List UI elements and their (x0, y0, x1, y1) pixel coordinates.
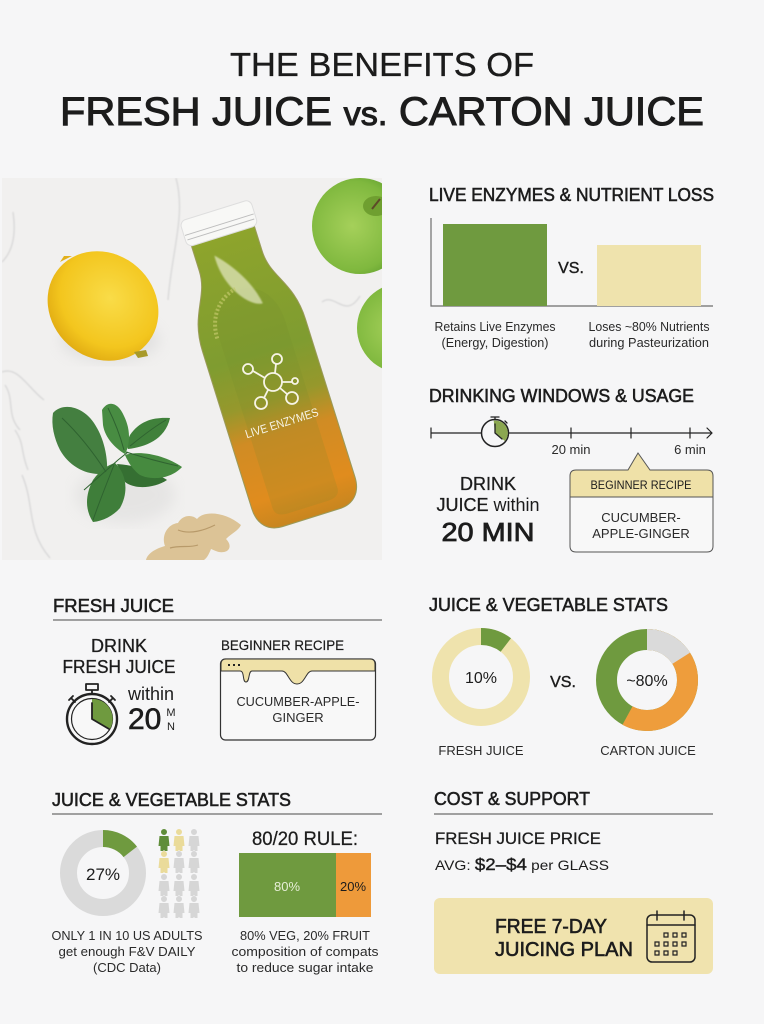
80/20 caption: 80% VEG, 20% FRUIT (240, 928, 370, 943)
recipe card: GINGER (272, 710, 324, 725)
price: AVG: $2–$4 per GLASS (435, 855, 609, 874)
bottle label: LIVE ENZYMES (243, 405, 320, 441)
call to action: free plan: FREE 7-DAY (495, 916, 607, 938)
bar labels: (Energy, Digestion) (442, 335, 548, 350)
icon: ginger (146, 513, 241, 560)
drink within callout: DRINK (460, 474, 516, 494)
bar labels (434, 319, 710, 350)
bar chart: VS. (558, 260, 584, 277)
icon: stopwatch (67, 684, 117, 744)
adults caption: (CDC Data) (93, 960, 161, 975)
80/20 caption: to reduce sugar intake (236, 960, 374, 975)
call to action: free plan (434, 898, 713, 974)
bar chart (431, 218, 713, 306)
photo: juice bottle on marble (2, 178, 382, 560)
title (60, 46, 704, 134)
heading: LIVE ENZYMES & NUTRIENT LOSS (429, 185, 714, 205)
heading: DRINKING WINDOWS & USAGE (429, 386, 694, 406)
icon: mint leaves (52, 404, 182, 522)
80/20 rule heading: 80/20 RULE: (252, 829, 358, 850)
adults caption (52, 928, 203, 975)
title: THE BENEFITS OF (230, 46, 534, 83)
vs label: VS. (550, 674, 576, 691)
drink instruction: DRINK (91, 636, 147, 656)
bar labels: during Pasteurization (589, 335, 709, 350)
icon: green apples (312, 178, 382, 368)
donut: 27% (68, 838, 138, 908)
panel: cost and support (434, 789, 713, 974)
icon: lemon (48, 251, 158, 361)
within 20 min (127, 684, 176, 736)
bar labels: Retains Live Enzymes (434, 319, 556, 334)
drink within callout (436, 474, 540, 547)
drink instruction: FRESH JUICE (62, 657, 176, 677)
stacked bar (239, 853, 371, 917)
donut: fresh juice (440, 636, 522, 718)
recipe label: BEGINNER RECIPE (221, 637, 344, 653)
icon: juice bottle (180, 200, 358, 528)
recipe card (570, 453, 713, 552)
bar labels: Loses ~80% Nutrients (588, 319, 710, 334)
price: FRESH JUICE PRICE (435, 829, 601, 848)
price (435, 829, 609, 874)
icon: enzyme molecule on bottle (243, 354, 298, 409)
adults caption: get enough F&V DAILY (58, 944, 196, 959)
within 20 min: 20 (128, 703, 161, 736)
donut: carton juice (606, 640, 688, 720)
heading: JUICE & VEGETABLE STATS (429, 595, 668, 615)
icon: stopwatch (482, 417, 509, 446)
within 20 min: M (166, 707, 176, 719)
stacked bar: 80% (274, 879, 300, 894)
drink within callout: JUICE within (436, 495, 540, 515)
recipe card: BEGINNER RECIPE (590, 478, 692, 492)
icon grid: people (158, 829, 200, 918)
heading: JUICE & VEGETABLE STATS (52, 790, 291, 810)
heading: COST & SUPPORT (434, 789, 590, 809)
stacked bar: 20% (340, 879, 366, 894)
80/20 caption (232, 928, 379, 975)
recipe card: APPLE-GINGER (592, 526, 690, 541)
timeline: 6 min (674, 442, 706, 457)
donut labels: CARTON JUICE (600, 743, 696, 758)
title: FRESH JUICE vs. CARTON JUICE (60, 90, 704, 134)
within 20 min: N (167, 721, 175, 733)
panel: juice and vegetable stats, adults and 80/20 (52, 790, 382, 975)
donut labels (438, 743, 696, 758)
donut: fresh juice: 10% (465, 670, 497, 687)
drink instruction (62, 636, 176, 677)
recipe card: CUCUMBER-APPLE- (236, 694, 360, 709)
timeline: 20 min (551, 442, 591, 457)
panel: live enzymes and nutrient loss (429, 185, 714, 350)
recipe card (220, 659, 376, 740)
within 20 min: within (127, 684, 174, 704)
panel: juice and vegetable stats, donuts (429, 595, 696, 758)
adults caption: ONLY 1 IN 10 US ADULTS (52, 928, 203, 943)
call to action: free plan: JUICING PLAN (495, 939, 633, 961)
donut: carton juice: ~80% (626, 673, 668, 690)
drink within callout: 20 MIN (442, 517, 534, 547)
heading: FRESH JUICE (53, 596, 174, 616)
icon: calendar (647, 911, 695, 962)
panel: drinking windows and usage (429, 386, 713, 552)
donut: 27%: 27% (86, 865, 120, 884)
recipe card: CUCUMBER- (601, 510, 681, 525)
panel: fresh juice (53, 596, 382, 744)
donut labels: FRESH JUICE (438, 743, 524, 758)
timeline (431, 417, 712, 457)
80/20 caption: composition of compats (232, 944, 379, 959)
